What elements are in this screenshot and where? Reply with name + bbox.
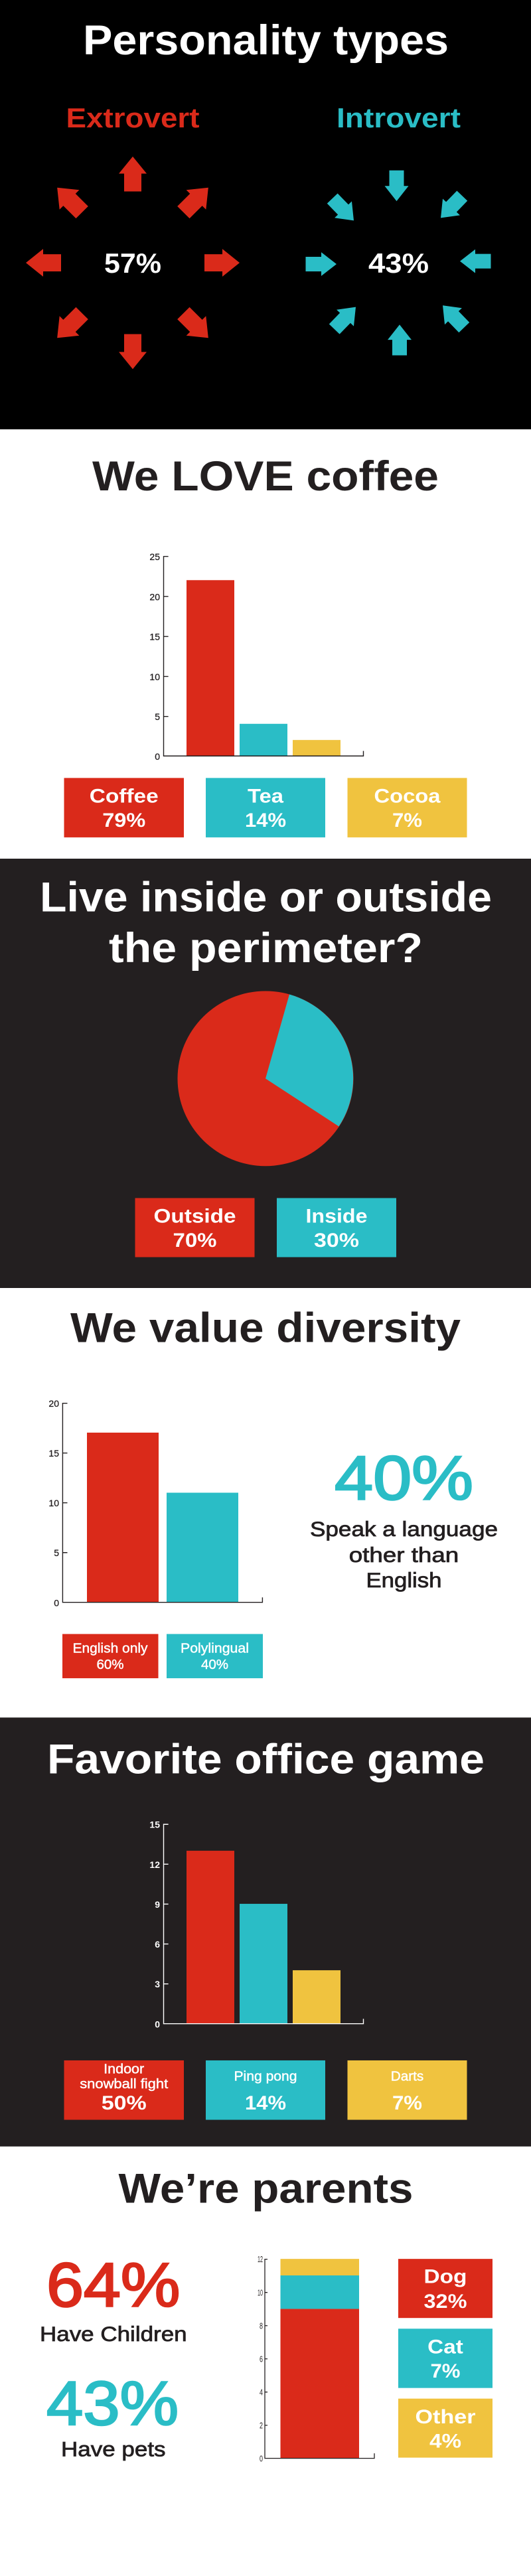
stacked bar chart: pets: 4 (260, 2388, 263, 2397)
panel: favorite office game (0, 1717, 531, 2147)
bar chart: drinks (149, 551, 363, 762)
legend: darts: 7% (392, 2092, 422, 2114)
legend: cat: Cat (427, 2336, 463, 2358)
legend: indoor snowball fight (64, 2060, 184, 2120)
text: speak a language other than english: other than (349, 1543, 459, 1567)
legend: coffee (64, 778, 184, 837)
stacked bar chart: pets (258, 2254, 374, 2464)
bar chart: drinks: 25 (149, 551, 160, 562)
legend: english only (62, 1634, 158, 1678)
legend: other: 4% (429, 2431, 461, 2453)
legend: darts (348, 2060, 467, 2120)
bar chart: games: 15 (149, 1820, 160, 1830)
stacked bar chart: pets: 12 (258, 2254, 263, 2264)
legend: outside: 70% (173, 1230, 216, 1252)
legend: other: Other (416, 2406, 476, 2428)
legend: tea: Tea (248, 786, 283, 808)
bar chart: drinks: 10 (149, 672, 160, 682)
legend: cocoa: 7% (392, 810, 422, 831)
bar chart: drinks: 20 (149, 591, 160, 602)
title: live inside or outside the perimeter: Live inside or outside (40, 875, 492, 921)
legend: dog: Dog (423, 2266, 467, 2288)
title: we love coffee: We LOVE coffee (92, 453, 439, 500)
bar chart: games: 12 (149, 1859, 160, 1870)
legend: other (398, 2399, 493, 2458)
stacked bar chart: pets: 2 (260, 2421, 263, 2431)
bar chart: drinks: 5 (155, 711, 160, 722)
stat: 57%: 57% (104, 248, 161, 279)
legend: cat: 7% (430, 2360, 460, 2382)
legend: indoor snowball fight: 50% (102, 2092, 147, 2114)
stat: 43%: 43% (368, 248, 429, 279)
legend: cocoa: Cocoa (374, 786, 441, 808)
legend: english only: English only (72, 1641, 148, 1656)
panel: personality types (0, 0, 531, 429)
title: live inside or outside the perimeter: the perimeter? (109, 925, 423, 971)
legend: ping pong: Ping pong (234, 2069, 297, 2084)
bar chart: languages (48, 1398, 262, 1609)
title: live inside or outside the perimeter (40, 875, 492, 971)
text: speak a language other than english: Speak a language (310, 1517, 498, 1541)
legend: dog: 32% (423, 2291, 467, 2313)
title: favorite office game: Favorite office game (47, 1737, 485, 1783)
icon: outward red arrows (26, 157, 240, 369)
legend: inside (277, 1198, 396, 1257)
legend: polylingual (167, 1634, 263, 1678)
legend: english only: 60% (97, 1658, 124, 1672)
legend: ping pong (206, 2060, 325, 2120)
text: speak a language other than english: English (366, 1568, 441, 1592)
legend: indoor snowball fight: snowball fight (80, 2077, 169, 2092)
bar chart: games: 9 (155, 1899, 160, 1910)
heading: introvert: Introvert (337, 102, 461, 133)
panel: we're parents (40, 2166, 493, 2464)
stat: 43%: 43% (46, 2368, 179, 2438)
bar chart: languages: 0 (54, 1598, 59, 1609)
legend: coffee: Coffee (90, 786, 159, 808)
stacked bar chart: pets: 6 (260, 2354, 263, 2364)
bar chart: games: 0 (155, 2019, 160, 2030)
legend: polylingual: Polylingual (181, 1641, 249, 1656)
legend: ping pong: 14% (245, 2092, 286, 2114)
stat: 64%: 64% (46, 2250, 180, 2319)
bar chart: languages: 15 (48, 1448, 59, 1459)
bar chart: drinks: 0 (155, 751, 160, 762)
legend: coffee: 79% (102, 810, 145, 831)
legend: cat (398, 2328, 493, 2388)
stat: 40%: 40% (335, 1443, 473, 1512)
icon: inward teal arrows (305, 171, 491, 356)
bar chart: languages: 20 (48, 1398, 59, 1409)
stacked bar chart: pets: 0 (260, 2454, 263, 2464)
legend: cocoa (348, 778, 467, 837)
title: we're parents: We’re parents (118, 2166, 413, 2212)
legend: darts: Darts (391, 2069, 423, 2084)
text: speak a language other than english (310, 1517, 498, 1592)
legend: outside (135, 1198, 255, 1257)
legend: dog (398, 2259, 493, 2318)
pie chart: perimeter (178, 991, 353, 1166)
title: we value diversity: We value diversity (70, 1305, 461, 1352)
legend: inside: 30% (314, 1230, 359, 1252)
legend: tea: 14% (245, 810, 286, 831)
stacked bar chart: pets: 10 (258, 2287, 263, 2297)
panel: live inside or outside (0, 859, 531, 1288)
bar chart: games: 6 (155, 1939, 160, 1950)
bar chart: games: 3 (155, 1979, 160, 1989)
legend: tea (206, 778, 325, 837)
legend: polylingual: 40% (201, 1658, 228, 1672)
bar chart: games (149, 1820, 363, 2030)
text: have children: Have Children (40, 2322, 187, 2346)
legend: inside: Inside (305, 1205, 367, 1227)
heading: extrovert: Extrovert (66, 102, 200, 133)
legend: outside: Outside (154, 1205, 236, 1227)
legend: indoor snowball fight: Indoor (104, 2062, 145, 2076)
bar chart: languages: 10 (48, 1498, 59, 1508)
text: have pets: Have pets (61, 2437, 166, 2461)
panel: we value diversity (48, 1305, 498, 1678)
stacked bar chart: pets: 8 (260, 2321, 263, 2330)
bar chart: drinks: 15 (149, 632, 160, 642)
title: personality types: Personality types (83, 17, 449, 64)
panel: we love coffee (64, 453, 467, 837)
bar chart: languages: 5 (54, 1547, 59, 1558)
